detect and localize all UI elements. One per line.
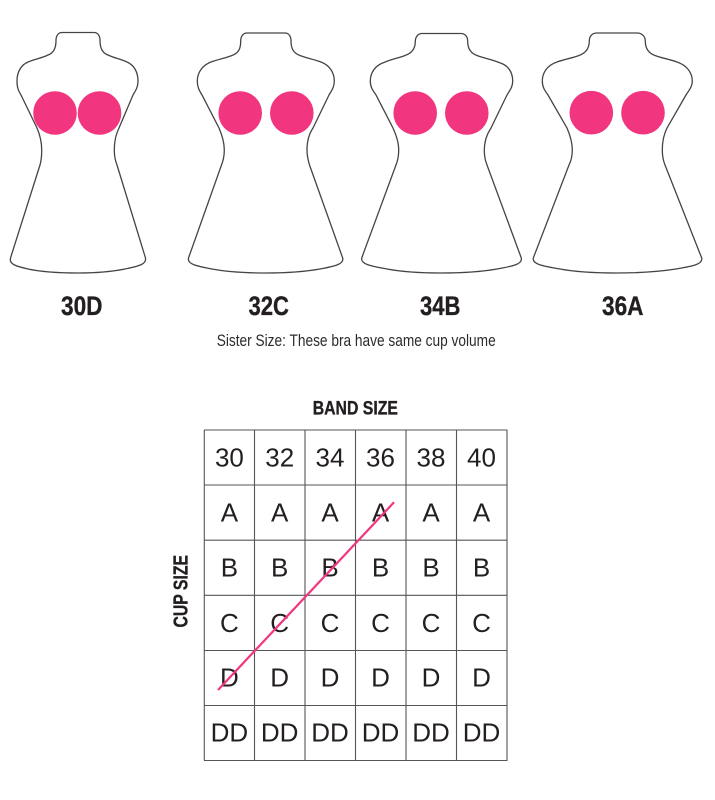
mannequin body outline 36A xyxy=(533,33,702,273)
cup B row: B xyxy=(321,553,339,583)
cup D row: D xyxy=(270,663,289,693)
cup DD row: DD xyxy=(463,718,500,748)
cup DD row: DD xyxy=(261,718,298,748)
panel: mannequin 36A xyxy=(533,33,702,273)
cup D row: D xyxy=(220,663,239,693)
cup C row: C xyxy=(472,608,491,638)
cup C row: C xyxy=(321,608,339,638)
cup A row: A xyxy=(372,498,390,528)
cup DD row: DD xyxy=(362,718,399,748)
cup D row xyxy=(220,663,491,693)
left cup circle 34B xyxy=(393,91,437,135)
band size row: 34 xyxy=(316,443,344,473)
cup B row: B xyxy=(422,553,440,583)
cup A row: A xyxy=(221,498,239,528)
mannequin body outline 32C xyxy=(188,33,343,273)
cup C row: C xyxy=(422,608,440,638)
mannequin body outline 34B xyxy=(362,34,521,273)
left cup circle 36A xyxy=(570,91,613,134)
caption: sister size explanation: Sister Size: These bra have same cup volume xyxy=(217,332,496,350)
cup C row: C xyxy=(220,608,239,638)
right cup circle 36A xyxy=(621,91,665,134)
size label 36A: 36A xyxy=(602,291,644,321)
cup D row: D xyxy=(472,663,491,693)
panel: mannequin 34B xyxy=(362,34,521,273)
left cup circle 32C xyxy=(218,91,262,135)
mannequin body outline 30D xyxy=(10,32,146,273)
cup D row: D xyxy=(321,663,339,693)
cup C row xyxy=(220,608,491,638)
band size row xyxy=(215,443,496,473)
diagonal sister size line xyxy=(218,502,394,690)
size label 34B: 34B xyxy=(420,291,460,321)
panel: mannequin 30D xyxy=(10,32,146,273)
cup A row: A xyxy=(473,498,491,528)
chart: band and cup size table xyxy=(204,430,508,760)
cup B row: B xyxy=(372,553,389,583)
cup DD row xyxy=(211,718,500,748)
right cup circle 34B xyxy=(445,91,489,135)
left cup circle 30D xyxy=(33,91,77,135)
cup D row: D xyxy=(371,663,390,693)
cup C row: C xyxy=(270,608,289,638)
cup D row: D xyxy=(422,663,440,693)
cup A row: A xyxy=(271,498,289,528)
cup DD row: DD xyxy=(311,718,349,748)
panel: mannequin 32C xyxy=(188,33,343,273)
table grid lines xyxy=(204,430,508,760)
band size row: 30 xyxy=(215,443,244,473)
cup DD row: DD xyxy=(412,718,450,748)
cup DD row: DD xyxy=(211,718,248,748)
size label 32C: 32C xyxy=(248,291,289,321)
right cup circle 32C xyxy=(270,91,314,135)
heading: band size: BAND SIZE xyxy=(313,398,398,420)
cup B row: B xyxy=(271,553,288,583)
cup B row: B xyxy=(221,553,238,583)
cup C row: C xyxy=(371,608,390,638)
cup A row: A xyxy=(422,498,440,528)
cup A row: A xyxy=(321,498,339,528)
band size row: 32 xyxy=(265,443,294,473)
heading: cup size: CUP SIZE xyxy=(169,555,192,628)
band size row: 36 xyxy=(366,443,395,473)
cup B row xyxy=(221,553,490,583)
band size row: 38 xyxy=(417,443,445,473)
cup A row xyxy=(221,498,491,528)
band size row: 40 xyxy=(467,443,496,473)
right cup circle 30D xyxy=(78,91,121,135)
cup B row: B xyxy=(473,553,490,583)
size label 30D: 30D xyxy=(61,291,102,321)
